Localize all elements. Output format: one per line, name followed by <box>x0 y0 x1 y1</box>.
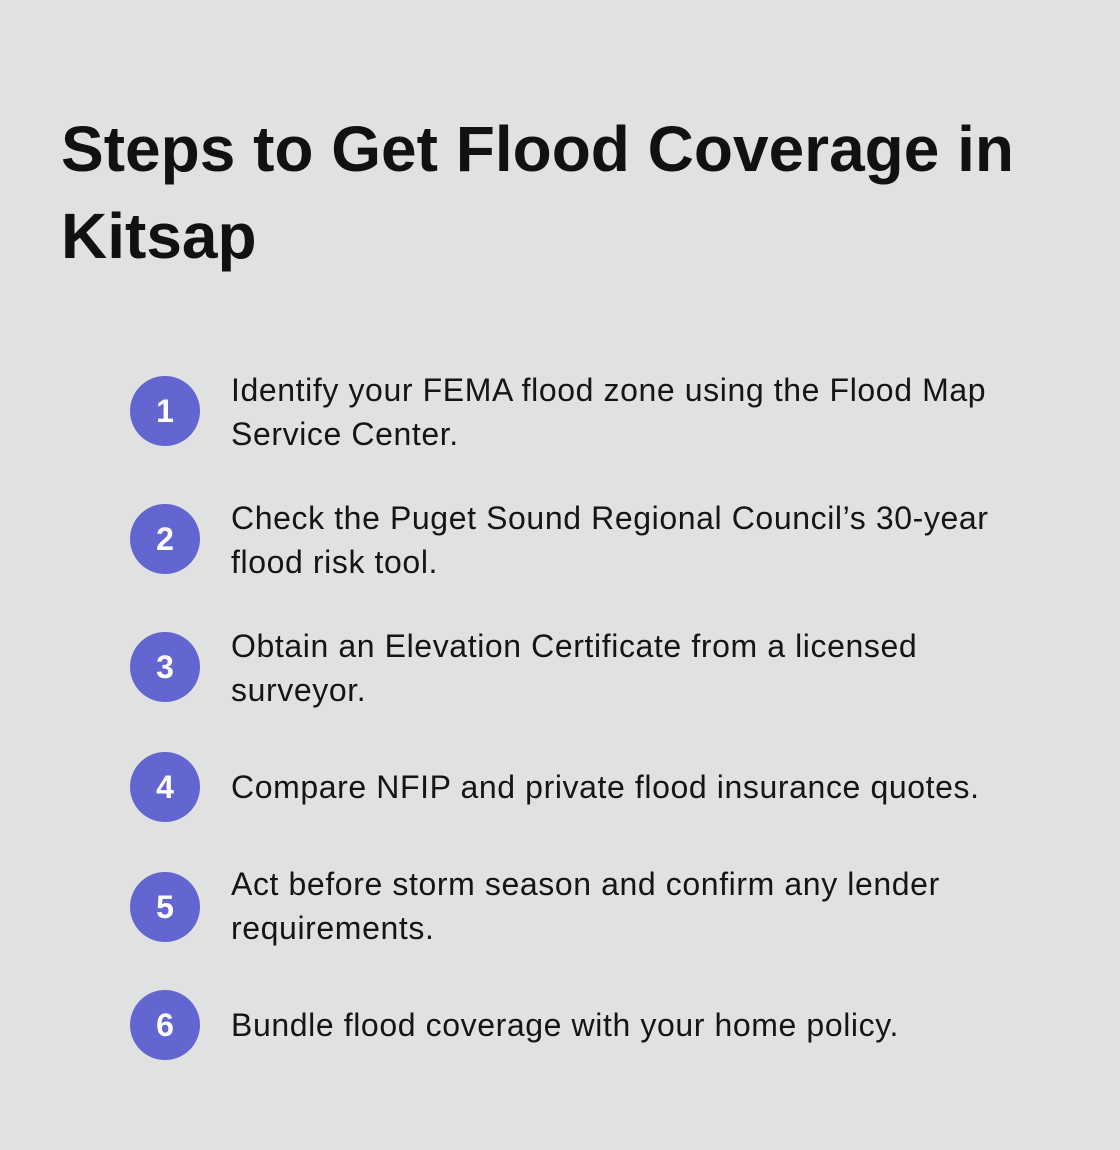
text 1: Service Center. <box>231 416 459 452</box>
text 5 <box>231 866 940 946</box>
circle 4 <box>130 752 200 822</box>
circle 6: 6 <box>156 1007 174 1043</box>
step 2 <box>130 500 989 580</box>
text 5: Act before storm season and confirm any lender <box>231 866 940 902</box>
circle 1: 1 <box>156 393 174 429</box>
circle 1 <box>130 376 200 446</box>
circle 3: 3 <box>156 649 174 685</box>
circle 2: 2 <box>156 521 174 557</box>
text 6: Bundle flood coverage with your home policy. <box>231 1007 899 1043</box>
text 2: Check the Puget Sound Regional Council’s 30-year <box>231 500 989 536</box>
text 4: Compare NFIP and private flood insurance quotes. <box>231 769 980 805</box>
circle 3 <box>130 632 200 702</box>
circle 2 <box>130 504 200 574</box>
title: Steps to Get Flood Coverage in <box>61 113 1014 185</box>
step 4 <box>130 752 980 822</box>
text 3: Obtain an Elevation Certificate from a licensed <box>231 628 917 664</box>
title <box>61 113 1014 272</box>
circle 4: 4 <box>156 769 174 805</box>
text 2: flood risk tool. <box>231 544 438 580</box>
text 1: Identify your FEMA flood zone using the Flood Map <box>231 372 986 408</box>
text 5: requirements. <box>231 910 434 946</box>
step 3 <box>130 628 917 708</box>
circle 5: 5 <box>156 889 174 925</box>
title: Kitsap <box>61 200 257 272</box>
step 6 <box>130 990 899 1060</box>
text 3: surveyor. <box>231 672 366 708</box>
step 1 <box>130 372 986 452</box>
text 1 <box>231 372 986 452</box>
step 5 <box>130 866 940 946</box>
text 3 <box>231 628 917 708</box>
circle 6 <box>130 990 200 1060</box>
circle 5 <box>130 872 200 942</box>
text 2 <box>231 500 989 580</box>
